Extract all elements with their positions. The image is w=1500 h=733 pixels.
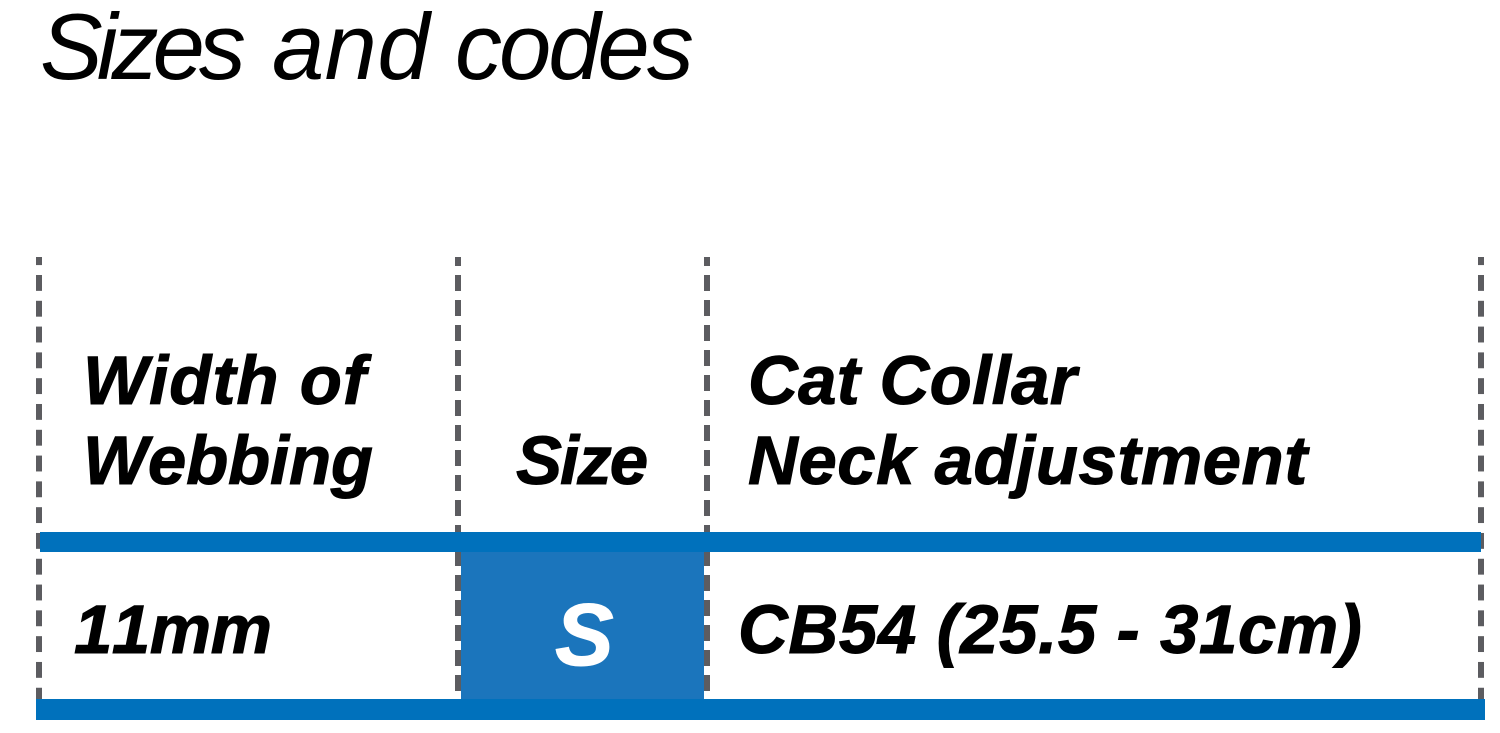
header underline bar (40, 532, 1481, 552)
value: S: S (555, 585, 614, 684)
value: CB54: CB54 (25.5 - 31cm) (738, 591, 1362, 668)
header: width of webbing (83, 342, 373, 499)
header: cat collar neck adjustment (748, 342, 1310, 499)
header: cat collar neck adjustment: Cat Collar (748, 342, 1077, 419)
dashed column line 3 (704, 257, 710, 700)
size S cell (461, 552, 704, 699)
dashed column line 2 (455, 257, 461, 700)
dashed column line 1 (36, 257, 42, 700)
header: cat collar neck adjustment: Neck adjustment (748, 422, 1308, 499)
table: sizes and codes (36, 257, 1485, 720)
title (40, 0, 692, 99)
header: width of webbing: Webbing (83, 422, 373, 499)
header: size: Size (516, 422, 646, 499)
bottom bar (36, 699, 1485, 720)
dashed column line 4 (1478, 257, 1484, 700)
header: width of webbing: Width of (83, 342, 367, 419)
value: 11mm: 11mm (74, 591, 271, 668)
